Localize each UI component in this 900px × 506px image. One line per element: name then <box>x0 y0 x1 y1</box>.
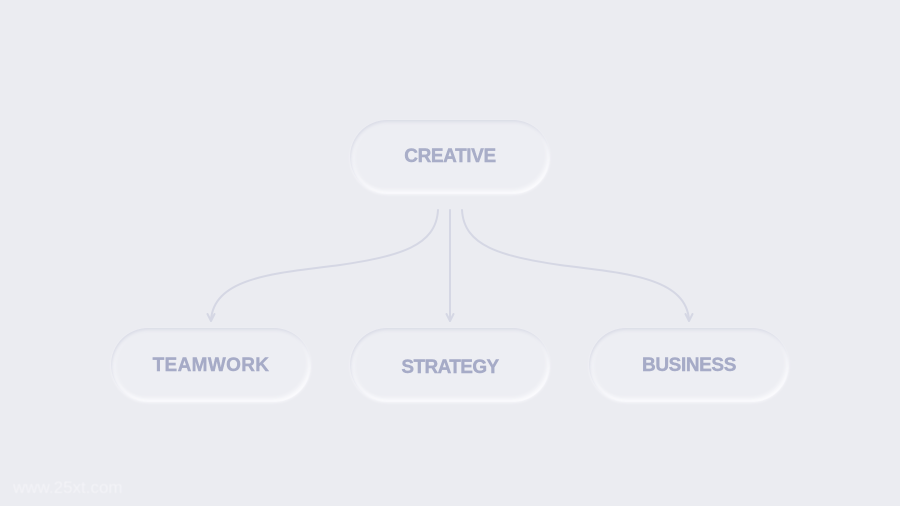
arrow: to TEAMWORK <box>208 210 438 321</box>
watermark: www.25xt.com <box>13 478 123 497</box>
node: TEAMWORK <box>111 328 311 402</box>
node: CREATIVE: CREATIVE <box>404 146 496 167</box>
node: STRATEGY: STRATEGY <box>401 357 499 378</box>
node: BUSINESS <box>589 328 789 402</box>
node: TEAMWORK: TEAMWORK <box>153 355 269 376</box>
arrow: to STRATEGY <box>446 210 454 321</box>
node: STRATEGY <box>350 328 550 402</box>
node: BUSINESS: BUSINESS <box>642 355 736 376</box>
arrow: to BUSINESS <box>462 210 692 321</box>
node: CREATIVE <box>350 120 550 194</box>
